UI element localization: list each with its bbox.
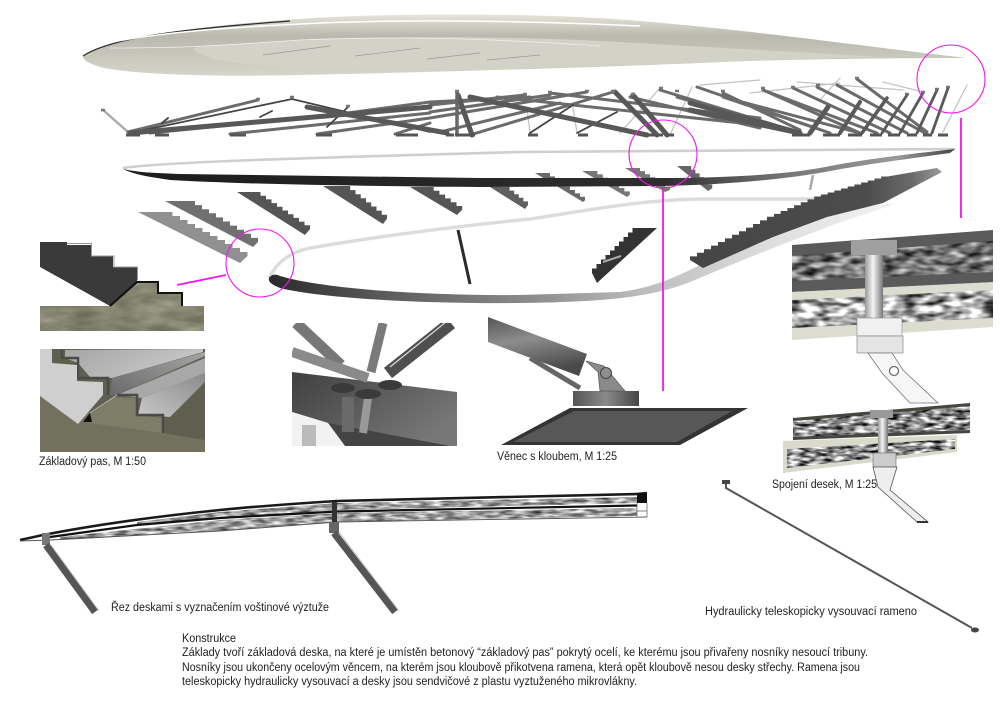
text block: construction description [182, 633, 868, 688]
text block: construction description: Základy tvoří základová deska, na které je umístěn betonový “základový pas” pokrytý ocelí, ke kterému jsou přivařeny nosníky nesoucí tribuny. [182, 647, 868, 659]
text block: construction description: Konstrukce [182, 633, 236, 645]
stair beams [138, 166, 712, 263]
section through roof plates [20, 490, 647, 612]
caption: ring beam: Věnec s kloubem, M 1:25 [497, 451, 617, 463]
caption: foundation strip: Základový pas, M 1:50 [39, 456, 146, 468]
lower foundation ring [269, 168, 942, 303]
detail: foundation strip perspective [40, 349, 205, 452]
detail: plate connection large [792, 230, 993, 403]
telescopic hydraulic arm [722, 480, 979, 632]
steel ring beam [123, 149, 955, 190]
caption: plate section: Řez deskami s vyznačením voštinové výztuže [111, 601, 329, 614]
truss arms [101, 78, 967, 135]
detail: ring beam with joint [488, 317, 748, 445]
text block: construction description: teleskopicky hydraulicky vysouvací a desky jsou sendvičové z plastu vyztuženého mikrovlákny. [182, 676, 637, 688]
caption: telescopic arm: Hydraulicky teleskopicky vysouvací rameno [705, 606, 917, 618]
detail: plate connection small [783, 403, 970, 522]
detail: roof strut joint [292, 322, 457, 446]
panel: exploded view of the stadium [83, 14, 967, 303]
roof shell [83, 14, 967, 76]
caption: plate connection: Spojení desek, M 1:25 [772, 479, 877, 491]
callout circles and leaders [177, 45, 985, 391]
detail: foundation strip section [40, 242, 204, 331]
text block: construction description: Nosníky jsou ukončeny ocelovým věncem, na kterém jsou kloubově přikotvena ramena, která opět kloubově nesou desky střechy. Ramena jsou [182, 662, 860, 674]
